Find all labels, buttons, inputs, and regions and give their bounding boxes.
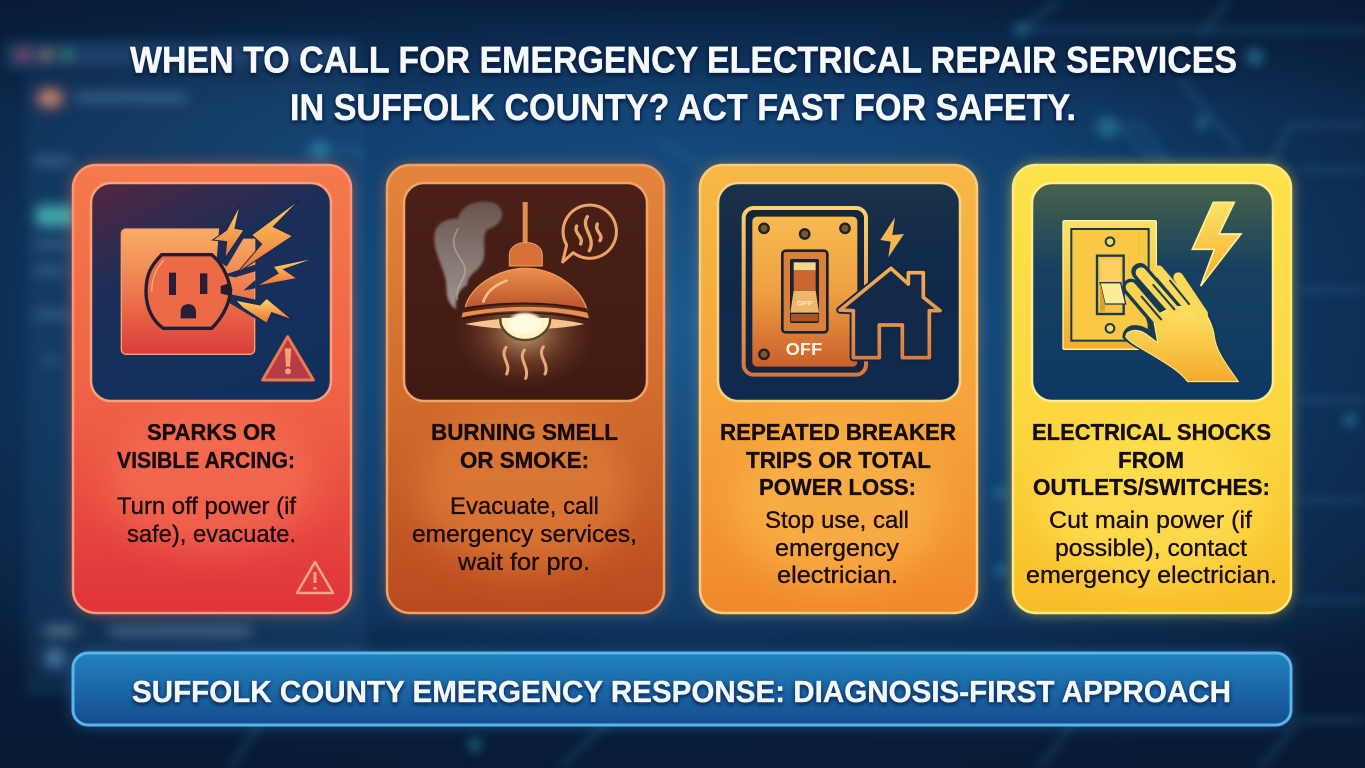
- small bolt: [880, 217, 904, 257]
- icon: ceiling lamp with smoke: [434, 202, 616, 388]
- body text: emergency electrician.: [1026, 562, 1277, 589]
- heading: REPEATED BREAKER: [720, 419, 956, 445]
- smell bubble: [563, 205, 616, 262]
- heading: BURNING SMELL: [431, 419, 618, 445]
- bolt: [1192, 202, 1241, 286]
- body text: emergency services,: [412, 521, 637, 548]
- bulb opening: [465, 318, 584, 329]
- heading: OR SMOKE:: [460, 447, 589, 473]
- body text: [117, 493, 296, 548]
- title: WHEN TO CALL FOR EMERGENCY ELECTRICAL REPAIR SERVICES: [130, 40, 1237, 80]
- body text: [1026, 507, 1277, 589]
- shade: [465, 268, 587, 309]
- icon: breaker switch off: OFF: [786, 339, 823, 359]
- smoke: [434, 202, 502, 309]
- body text: Cut main power (if: [1049, 507, 1252, 534]
- heading: [431, 419, 618, 473]
- heading: TRIPS OR TOTAL: [746, 447, 931, 473]
- icon: small warning outline: [297, 562, 333, 593]
- icon: hand on switch: [1063, 202, 1241, 382]
- icon: warning triangle: [263, 337, 313, 380]
- heading: VISIBLE ARCING:: [117, 447, 295, 473]
- heading: [720, 419, 956, 500]
- hand: [1124, 271, 1238, 382]
- heading: [117, 419, 295, 473]
- card: burning smell or smoke: [386, 164, 665, 614]
- body text: Evacuate, call: [450, 493, 599, 520]
- heading: ELECTRICAL SHOCKS: [1032, 419, 1271, 445]
- banner: [72, 652, 1292, 726]
- title: [130, 40, 1237, 128]
- body text: [412, 493, 637, 576]
- card: repeated breaker trips: [699, 164, 978, 614]
- blurred dashboard window: [6, 42, 366, 695]
- body text: Stop use, call: [765, 507, 909, 534]
- card: electrical shocks: [1012, 164, 1292, 614]
- heading: [1032, 419, 1271, 500]
- body text: emergency: [775, 535, 899, 562]
- icon: sparking outlet: [121, 199, 314, 354]
- heading: OUTLETS/SWITCHES:: [1033, 474, 1270, 500]
- body text: safe), evacuate.: [127, 521, 296, 548]
- body text: [765, 507, 909, 589]
- card: sparks or visible arcing: [72, 164, 352, 614]
- heading: SPARKS OR: [147, 419, 276, 445]
- icon: breaker switch off: OFF: [797, 300, 813, 307]
- body text: wait for pro.: [457, 549, 590, 576]
- title: IN SUFFOLK COUNTY? ACT FAST FOR SAFETY.: [290, 87, 1076, 128]
- heading: FROM: [1118, 447, 1184, 473]
- bolts: [213, 205, 244, 258]
- heading: POWER LOSS:: [759, 474, 916, 500]
- icon: breaker switch off: [744, 208, 940, 375]
- body text: electrician.: [777, 562, 898, 589]
- body text: Turn off power (if: [117, 493, 296, 520]
- heat waves: [504, 347, 546, 378]
- house: [840, 268, 940, 358]
- body text: possible), contact: [1055, 535, 1247, 562]
- banner text: SUFFOLK COUNTY EMERGENCY RESPONSE: DIAGNOSIS-FIRST APPROACH: [132, 674, 1231, 709]
